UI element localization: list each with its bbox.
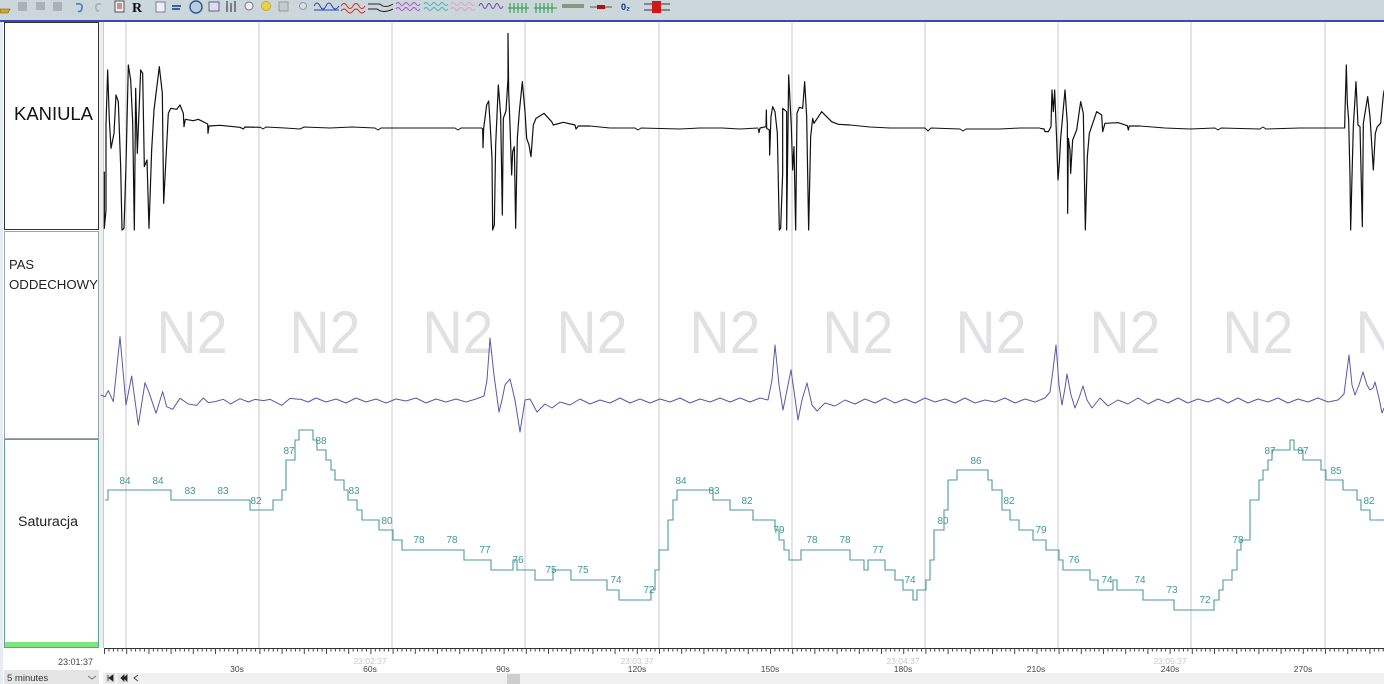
icon: undo redo (76, 4, 101, 12)
elapsed seconds: 180s (894, 664, 912, 674)
saturation values: 87 (1297, 446, 1309, 457)
saturation values: 82 (250, 496, 262, 507)
panel: PAS ODDECHOWY label: ODDECHOWY (9, 277, 98, 292)
saturation values: 82 (741, 496, 753, 507)
sleep stage labels N2: N2 (156, 299, 228, 366)
start time: 23:01:37 (58, 657, 93, 667)
elapsed seconds: 120s (628, 664, 646, 674)
saturation values: 84 (119, 476, 131, 487)
elapsed seconds: 60s (363, 664, 377, 674)
sleep stage labels N2: N2 (1222, 299, 1294, 366)
sleep stage labels N2: N2 (1090, 299, 1160, 366)
elapsed seconds: 210s (1027, 664, 1045, 674)
saturation values: 80 (381, 516, 393, 527)
sleep stage labels N2: N2 (556, 299, 628, 366)
saturation values: 79 (773, 525, 785, 536)
clock times (353, 656, 1187, 666)
icons: signal waves (314, 2, 612, 13)
saturation values: 87 (283, 446, 295, 457)
saturation values: 76 (512, 555, 524, 566)
saturation values: 83 (708, 486, 720, 497)
chart: respiratory belt trace (101, 337, 1384, 432)
zoom dropdown: 5 minutes (4, 670, 99, 684)
saturation values: 86 (970, 456, 982, 467)
saturation values: 74 (904, 575, 916, 586)
saturation values: 83 (184, 486, 196, 497)
icon: open folder (0, 9, 10, 13)
saturation values: 82 (1003, 496, 1015, 507)
elapsed seconds: 30s (230, 664, 244, 674)
saturation values: 76 (1068, 555, 1080, 566)
saturation values: 78 (839, 535, 851, 546)
icon: report (115, 1, 124, 12)
icon: O2: 0₂ (621, 2, 630, 12)
saturation values: 72 (643, 585, 655, 596)
saturation values: 78 (806, 535, 818, 546)
left margin (0, 22, 3, 684)
sleep stage labels N2: N2 (822, 299, 894, 366)
scroll bar (103, 673, 1384, 684)
sleep stage labels N2: N2 (422, 299, 494, 366)
zoom dropdown: 5 minutes: 5 minutes (7, 673, 48, 684)
sleep stage labels N2: N2 (956, 299, 1026, 366)
icon: R: R (132, 1, 143, 16)
saturation values: 80 (937, 516, 949, 527)
panel: Saturacja label: Saturacja (18, 514, 79, 529)
panel: KANIULA label (4, 22, 98, 230)
saturation values: 74 (1101, 575, 1113, 586)
saturation values: 79 (1035, 525, 1047, 536)
clock times: 23:04:37 (886, 656, 920, 666)
saturation values: 82 (1363, 496, 1375, 507)
clock times: 23:02:37 (353, 656, 387, 666)
elapsed seconds: 150s (761, 664, 779, 674)
saturation values: 85 (1330, 466, 1342, 477)
icon: red marker (644, 1, 670, 13)
elapsed seconds: 240s (1161, 664, 1179, 674)
saturation values: 77 (872, 545, 884, 556)
saturation values: 78 (1232, 535, 1244, 546)
sleep stage labels N2: N2 (690, 299, 760, 366)
saturation values: 73 (1166, 585, 1178, 596)
clock times: 23:05:37 (1153, 656, 1187, 666)
clock times: 23:03:37 (620, 656, 654, 666)
chart: oxygen saturation step trace (105, 430, 1384, 610)
panel: PAS ODDECHOWY label: PAS (9, 257, 34, 272)
saturation values: 83 (217, 486, 229, 497)
saturation values: 84 (675, 476, 687, 487)
saturation values: 84 (152, 476, 164, 487)
panel: KANIULA label: KANIULA (14, 104, 93, 124)
saturation values: 83 (348, 486, 360, 497)
saturation values: 72 (1199, 595, 1211, 606)
chart: cannula airflow trace (104, 33, 1384, 230)
elapsed seconds (230, 664, 1312, 674)
saturation values: 77 (479, 545, 491, 556)
sleep stage labels N2: N2 (290, 299, 360, 366)
saturation values: 75 (577, 565, 589, 576)
saturation values: 87 (1264, 446, 1276, 457)
time axis ruler (104, 648, 1384, 674)
saturation values: 78 (413, 535, 425, 546)
saturation values: 75 (545, 565, 557, 576)
panel: PAS ODDECHOWY label (4, 232, 98, 438)
elapsed seconds: 270s (1294, 664, 1312, 674)
sleep stage labels N2 (156, 299, 1384, 366)
panel: Saturacja label (4, 440, 98, 648)
saturation values: 88 (315, 436, 327, 447)
icons: grey file tools (18, 2, 62, 11)
saturation values: 78 (446, 535, 458, 546)
saturation values: 74 (1134, 575, 1146, 586)
saturation values (119, 436, 1375, 606)
elapsed seconds: 90s (496, 664, 510, 674)
toolbar (0, 0, 1384, 22)
icons: tools (156, 1, 306, 13)
saturation values: 74 (610, 575, 622, 586)
